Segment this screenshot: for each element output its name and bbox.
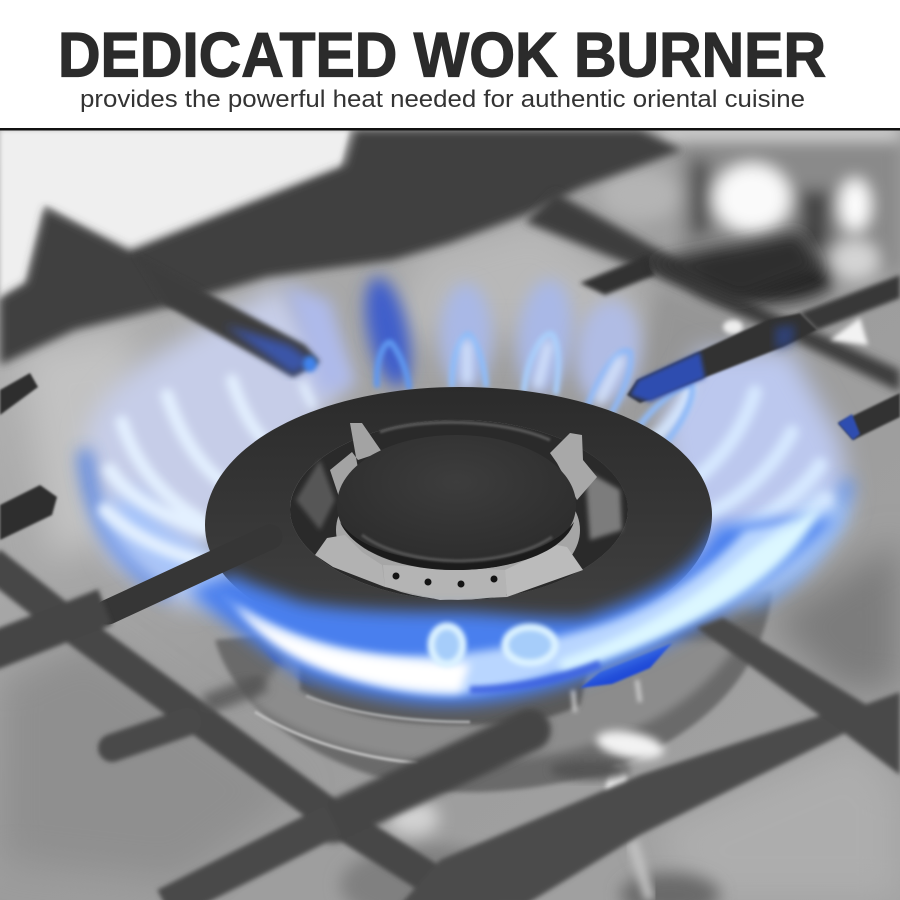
flames: pale lavender glow [85,273,850,610]
grate finger: right, blue tip [627,313,817,403]
highlights beside the cross [723,320,743,334]
flames: blue outer rim, left and right [85,450,848,605]
blue tip of far right finger [838,414,860,440]
bright flame band at the front of the burner [190,505,840,705]
right tongues [652,385,825,555]
right diagonal rail [697,618,900,775]
round black burner cap [337,435,576,570]
silver crown with gas ports [336,460,580,600]
rear cross rail [800,275,900,330]
back rail, out of focus [0,130,683,365]
wok ring support [205,387,712,650]
subtitle: provides the powerful heat needed for authentic oriental cuisine [80,86,805,113]
crown teeth [330,423,382,500]
right rail [525,192,900,392]
cross rail left of ring [0,607,105,652]
short rear finger [580,255,655,295]
steel burner well under the flames [215,590,772,810]
rail to bottom left [165,820,333,900]
rail up to the right of the junction [333,730,530,822]
grate fingers: left edge [0,373,57,540]
pale blue wash over the band [215,520,800,695]
white-hot core on the left [235,605,470,692]
left tongues [105,380,312,562]
blue reflection below the ring [580,643,672,688]
pale cyan core on the right [560,505,822,672]
flames: bright curved tongues around the burner [105,334,825,562]
burner head [290,420,628,600]
grate finger: upper left, blue tip [133,253,320,377]
dark hollow inside the ring [290,420,628,600]
grate finger: far right, blue tip [838,393,900,440]
grate finger: front left [108,537,270,612]
blue flame tips in front of the ring [431,626,555,664]
cast iron pan support grate: front section [0,562,900,900]
rear burner, out of focus [600,125,900,304]
bright wall behind the hob [0,130,350,300]
diagonal rail from left edge to bottom [0,562,480,900]
top arch flames [377,334,692,440]
short front finger [112,722,187,748]
cast iron pan support grate: back section [0,130,900,392]
header panel [0,0,900,130]
soft blue body of the band [190,515,840,705]
large front right rail [400,708,855,900]
title: DEDICATED WOK BURNER [58,20,826,90]
